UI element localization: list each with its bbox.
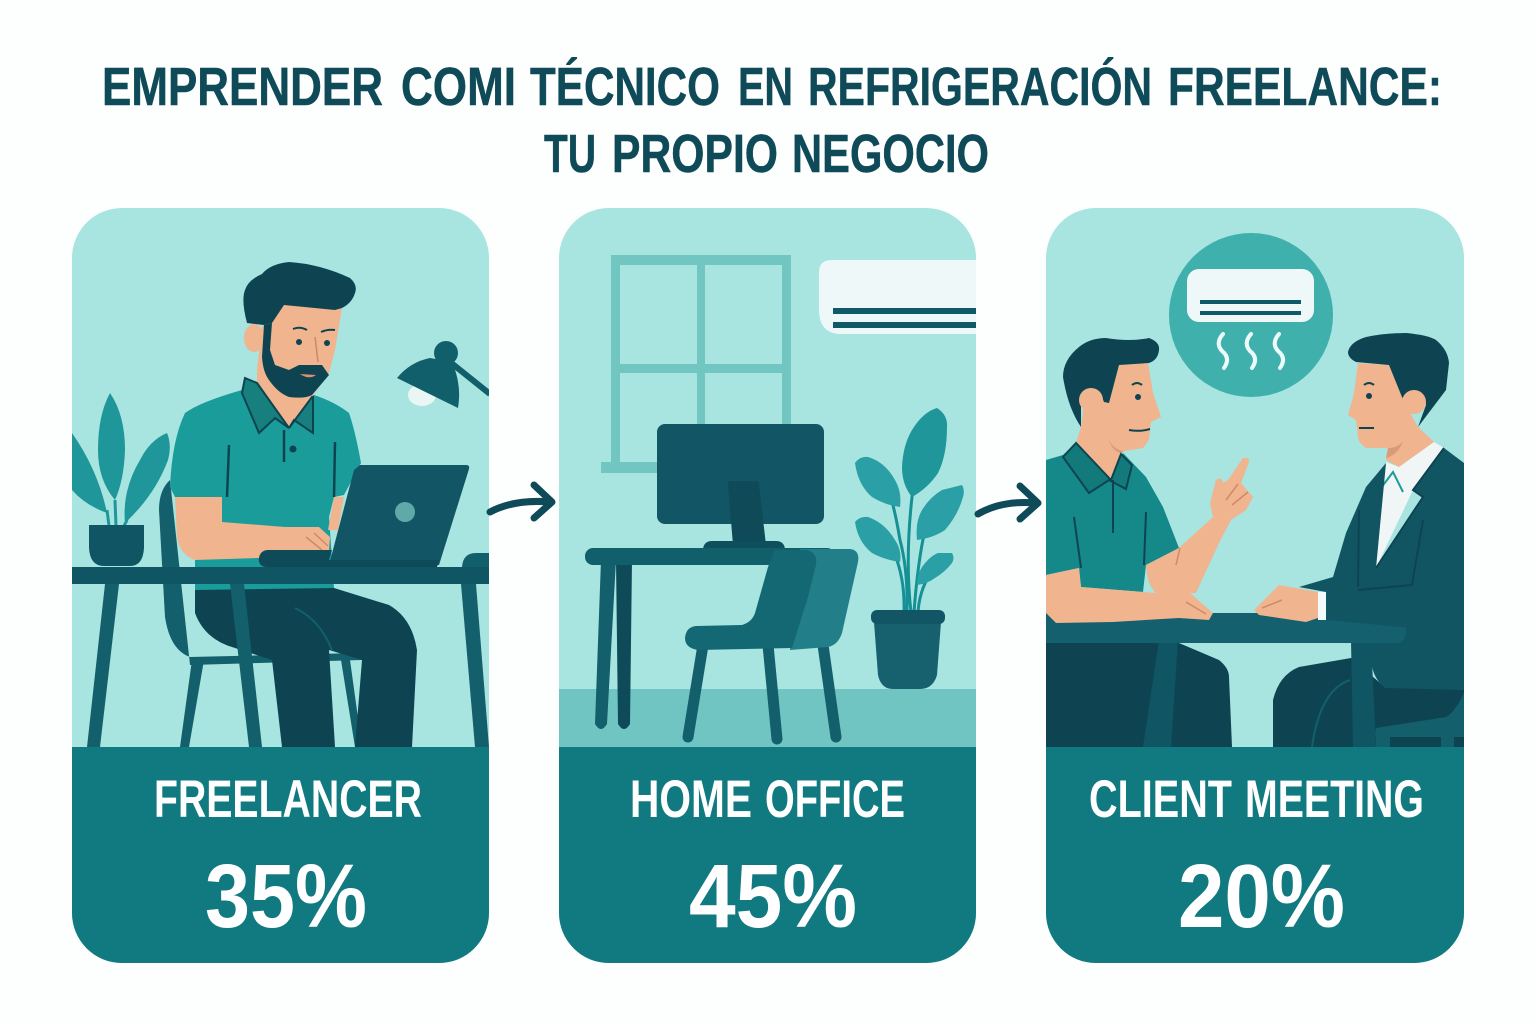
icon: desk lamp (397, 341, 490, 408)
chair (1374, 693, 1464, 747)
title: COMI (401, 57, 516, 117)
trousers (1273, 658, 1464, 747)
icon: air conditioner (819, 260, 976, 334)
arrow: freelancer to home office (490, 485, 552, 518)
hair (1063, 338, 1159, 427)
illustration: desk (585, 548, 835, 729)
hair (243, 262, 356, 325)
chair (1046, 697, 1144, 747)
title: EN (738, 57, 793, 117)
floor (559, 689, 976, 749)
label: home office: HOME (630, 770, 752, 829)
trousers (195, 588, 417, 747)
illustration: table (1046, 613, 1406, 747)
title: PROPIO (612, 124, 778, 184)
collar (242, 378, 289, 433)
title (102, 57, 1442, 184)
label: client meeting: CLIENT (1089, 770, 1232, 829)
title: TU (544, 124, 596, 184)
neck and face (1348, 363, 1434, 467)
title: REFRIGERACIÓN (808, 57, 1152, 117)
icon: shirt cuff (1318, 592, 1326, 620)
icon: potted plant (72, 393, 170, 566)
footer band (72, 747, 489, 963)
shirt (1376, 442, 1444, 568)
title: NEGOCIO (792, 124, 989, 184)
title: EMPRENDER (102, 57, 383, 117)
eye and mouth (1366, 393, 1372, 399)
panel: freelancer (72, 208, 490, 963)
beard (262, 323, 329, 398)
illustration: chair (159, 480, 363, 747)
arrow: home office to client meeting (978, 486, 1038, 519)
polo shirt (170, 390, 361, 590)
label: home office: OFFICE (765, 770, 905, 829)
illustration: right man (1273, 333, 1464, 747)
label: freelancer: FREELANCER (154, 770, 422, 829)
label: client meeting: MEETING (1245, 770, 1424, 829)
neck and face (1076, 363, 1161, 482)
icon: air conditioner bubble (1169, 233, 1333, 397)
illustration: chair (685, 549, 858, 739)
panel: home office (559, 208, 976, 963)
title: FREELANCE: (1168, 57, 1442, 117)
label: client meeting (1089, 770, 1424, 829)
trousers (1046, 643, 1232, 747)
illustration: desk (72, 567, 489, 747)
lower jacket (1366, 620, 1464, 690)
icon: laptop (259, 465, 489, 567)
shirt details (227, 430, 335, 497)
eye and mouth (1135, 394, 1141, 400)
raised arm and hand (1146, 458, 1253, 593)
value: 35%: 35% (205, 847, 367, 947)
footer band (559, 747, 976, 963)
footer band (1046, 747, 1464, 963)
icon: tall plant (855, 408, 964, 689)
eyes and nose (296, 339, 330, 346)
panel: client meeting (1046, 208, 1464, 963)
neck and face (257, 303, 342, 428)
polo shirt (1046, 443, 1179, 592)
illustration: left man (1046, 338, 1253, 747)
icon: window (601, 255, 791, 473)
value: 20%: 20% (1178, 847, 1345, 947)
arm (175, 497, 330, 560)
value: 45%: 45% (689, 847, 857, 947)
label: home office (630, 770, 905, 829)
title: TÉCNICO (530, 57, 720, 117)
illustration: suit jacket (1299, 448, 1464, 628)
icon: monitor (657, 424, 824, 549)
hair (1348, 333, 1449, 427)
illustration: freelancer figure (170, 262, 417, 747)
illustration: hands (1046, 568, 1318, 623)
